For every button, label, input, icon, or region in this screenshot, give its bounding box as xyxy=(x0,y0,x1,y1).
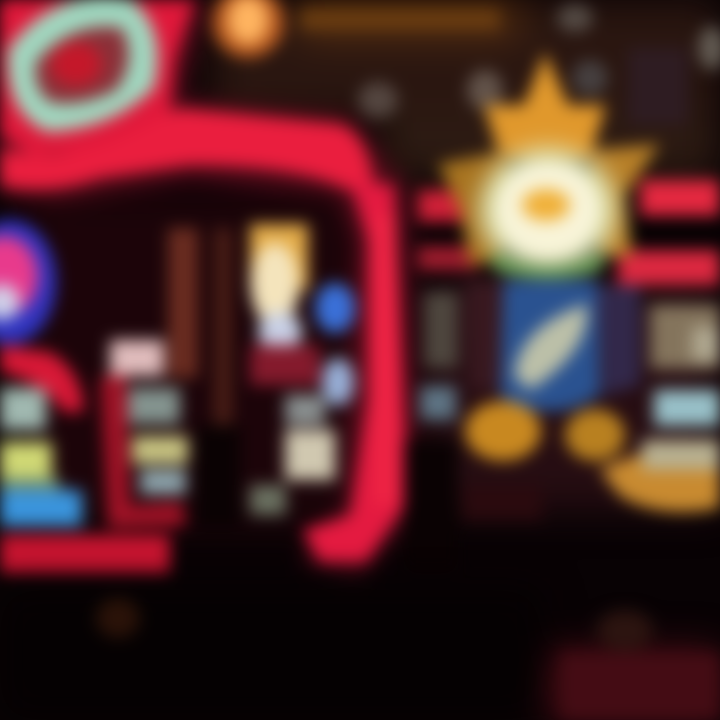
bottom red bar xyxy=(0,535,170,573)
red frame right pillar xyxy=(302,180,408,562)
panel: left slot reels xyxy=(0,388,82,526)
red glow xyxy=(0,0,415,575)
panel: right side machines xyxy=(420,292,720,426)
icon: gold base scrolls xyxy=(465,401,720,512)
icon: gold crown xyxy=(438,52,660,265)
red sign surround xyxy=(0,0,195,155)
left machine arch xyxy=(0,345,84,412)
icon: blue shield with feather xyxy=(465,280,640,412)
panel: center dark columns xyxy=(168,228,240,525)
top lights xyxy=(212,0,720,124)
panel: right red stripes xyxy=(418,180,720,285)
panel: red neon frame xyxy=(0,0,415,575)
panel: center window xyxy=(250,224,355,515)
lower glow details xyxy=(96,485,720,720)
panel: second machine reels xyxy=(110,340,188,494)
icon: glowing sun emblem xyxy=(480,148,616,278)
red frame top band xyxy=(0,108,374,190)
icon: left neon circle xyxy=(0,220,56,344)
dark foreground crowd xyxy=(0,440,540,720)
icon: mint ring sign xyxy=(8,0,158,132)
